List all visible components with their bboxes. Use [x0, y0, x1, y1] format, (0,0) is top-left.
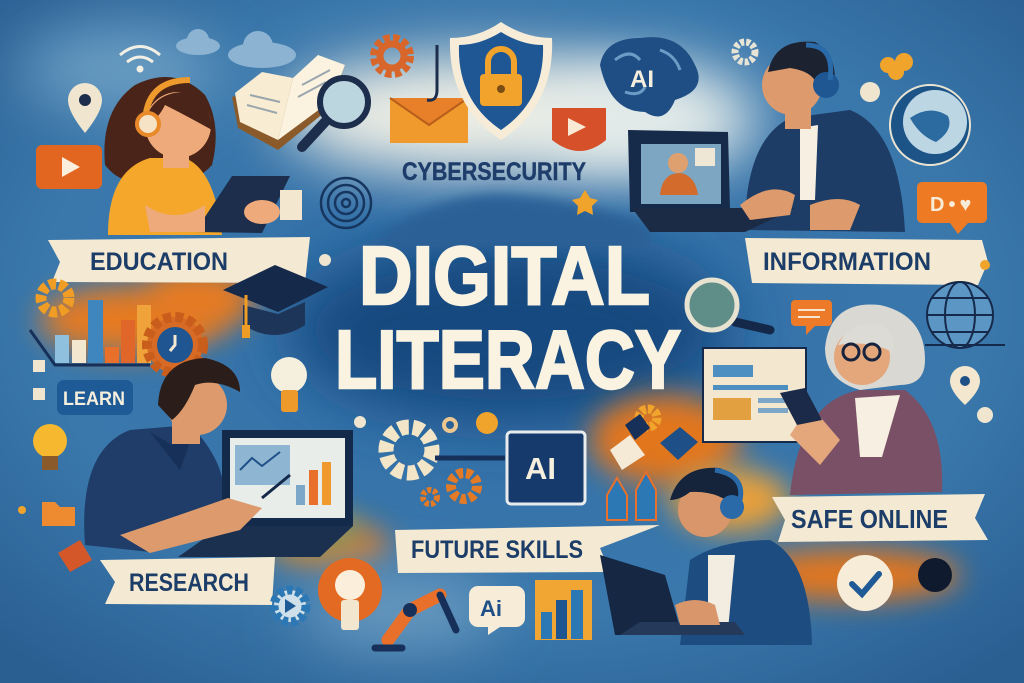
icon: wifi	[120, 46, 160, 71]
main title: DIGITAL	[359, 229, 650, 322]
icon: bulb center-left	[271, 357, 307, 412]
icon: map pin right	[950, 366, 980, 405]
decorative stars and dots	[18, 190, 990, 514]
icon: map pin	[68, 83, 102, 133]
icon: orange bulb	[318, 558, 382, 630]
person: man with laptop bottom-left	[84, 358, 353, 557]
icon: red envelope	[58, 540, 92, 572]
icon: wire globe	[925, 282, 1005, 348]
icon: magnifier right	[687, 280, 770, 330]
banner: information	[745, 238, 988, 285]
learn button	[57, 380, 133, 415]
icon: AI chip	[507, 432, 585, 504]
icon: dark sphere	[918, 558, 952, 592]
icon: blue tile	[660, 427, 698, 460]
icon: graduation cap	[223, 265, 328, 338]
bar chart bottom	[535, 580, 592, 640]
icon: magnifier	[302, 78, 368, 147]
icon: globe	[890, 85, 970, 165]
icon: gold gear	[639, 409, 657, 427]
decorative cream marks	[33, 82, 993, 428]
icon: robot arm	[375, 595, 456, 648]
person: girl with tablet	[104, 77, 302, 235]
banner: safe online: SAFE ONLINE	[791, 504, 948, 534]
banner: future skills: FUTURE SKILLS	[411, 536, 583, 564]
person: student with headphones	[600, 468, 812, 645]
main title	[335, 229, 681, 406]
icon: small gear and bulb top center	[444, 412, 498, 434]
person: man at laptop	[628, 42, 905, 232]
icon: cream gear	[735, 42, 755, 62]
icon: red play badge	[552, 108, 606, 151]
icon: blue gear	[274, 590, 306, 622]
icon: small yellow cluster	[880, 53, 913, 80]
icon: orange gear left	[41, 284, 69, 312]
icon: check circle	[837, 555, 893, 611]
icon: open book	[232, 55, 345, 150]
banner: research	[100, 557, 275, 605]
banner: education: EDUCATION	[90, 248, 228, 276]
banner: future skills	[395, 525, 660, 573]
icon: small orange gears	[423, 473, 477, 504]
panel: web page card	[703, 348, 806, 442]
icon: Ai speech bubble: Ai	[480, 596, 502, 621]
icon: orange gear	[375, 39, 409, 73]
icon: video folder	[36, 145, 102, 189]
icon: clouds	[176, 29, 296, 68]
icon: folder	[42, 502, 75, 526]
banner: information: INFORMATION	[763, 248, 931, 276]
icon: AI brain: AI	[630, 66, 654, 93]
icon: chat bubble: D•♥	[930, 194, 975, 216]
learn button: LEARN	[63, 389, 125, 410]
banner: research: RESEARCH	[129, 569, 249, 597]
bar chart left	[30, 300, 151, 365]
main title: LITERACY	[335, 313, 681, 406]
icon: gear with clock	[147, 317, 203, 373]
heading: cybersecurity: CYBERSECURITY	[402, 158, 586, 186]
banner: safe online	[772, 494, 988, 542]
banner: education	[48, 237, 310, 283]
icon: fingerprint	[321, 178, 371, 228]
icon: security shield	[450, 22, 552, 140]
icon: AI chip: AI	[525, 451, 556, 486]
icon: speech bubble right	[791, 300, 832, 335]
icon: small houses	[607, 472, 656, 520]
icon: Ai speech bubble	[469, 586, 525, 635]
icon: yellow bulb left	[33, 424, 67, 470]
person: older woman with phone	[780, 305, 942, 495]
icon: chat bubble	[917, 182, 987, 234]
icon: cream gear center	[386, 427, 505, 473]
icon: eraser	[610, 414, 650, 470]
icon: email with hook	[390, 45, 468, 143]
icon: AI brain	[600, 37, 699, 116]
